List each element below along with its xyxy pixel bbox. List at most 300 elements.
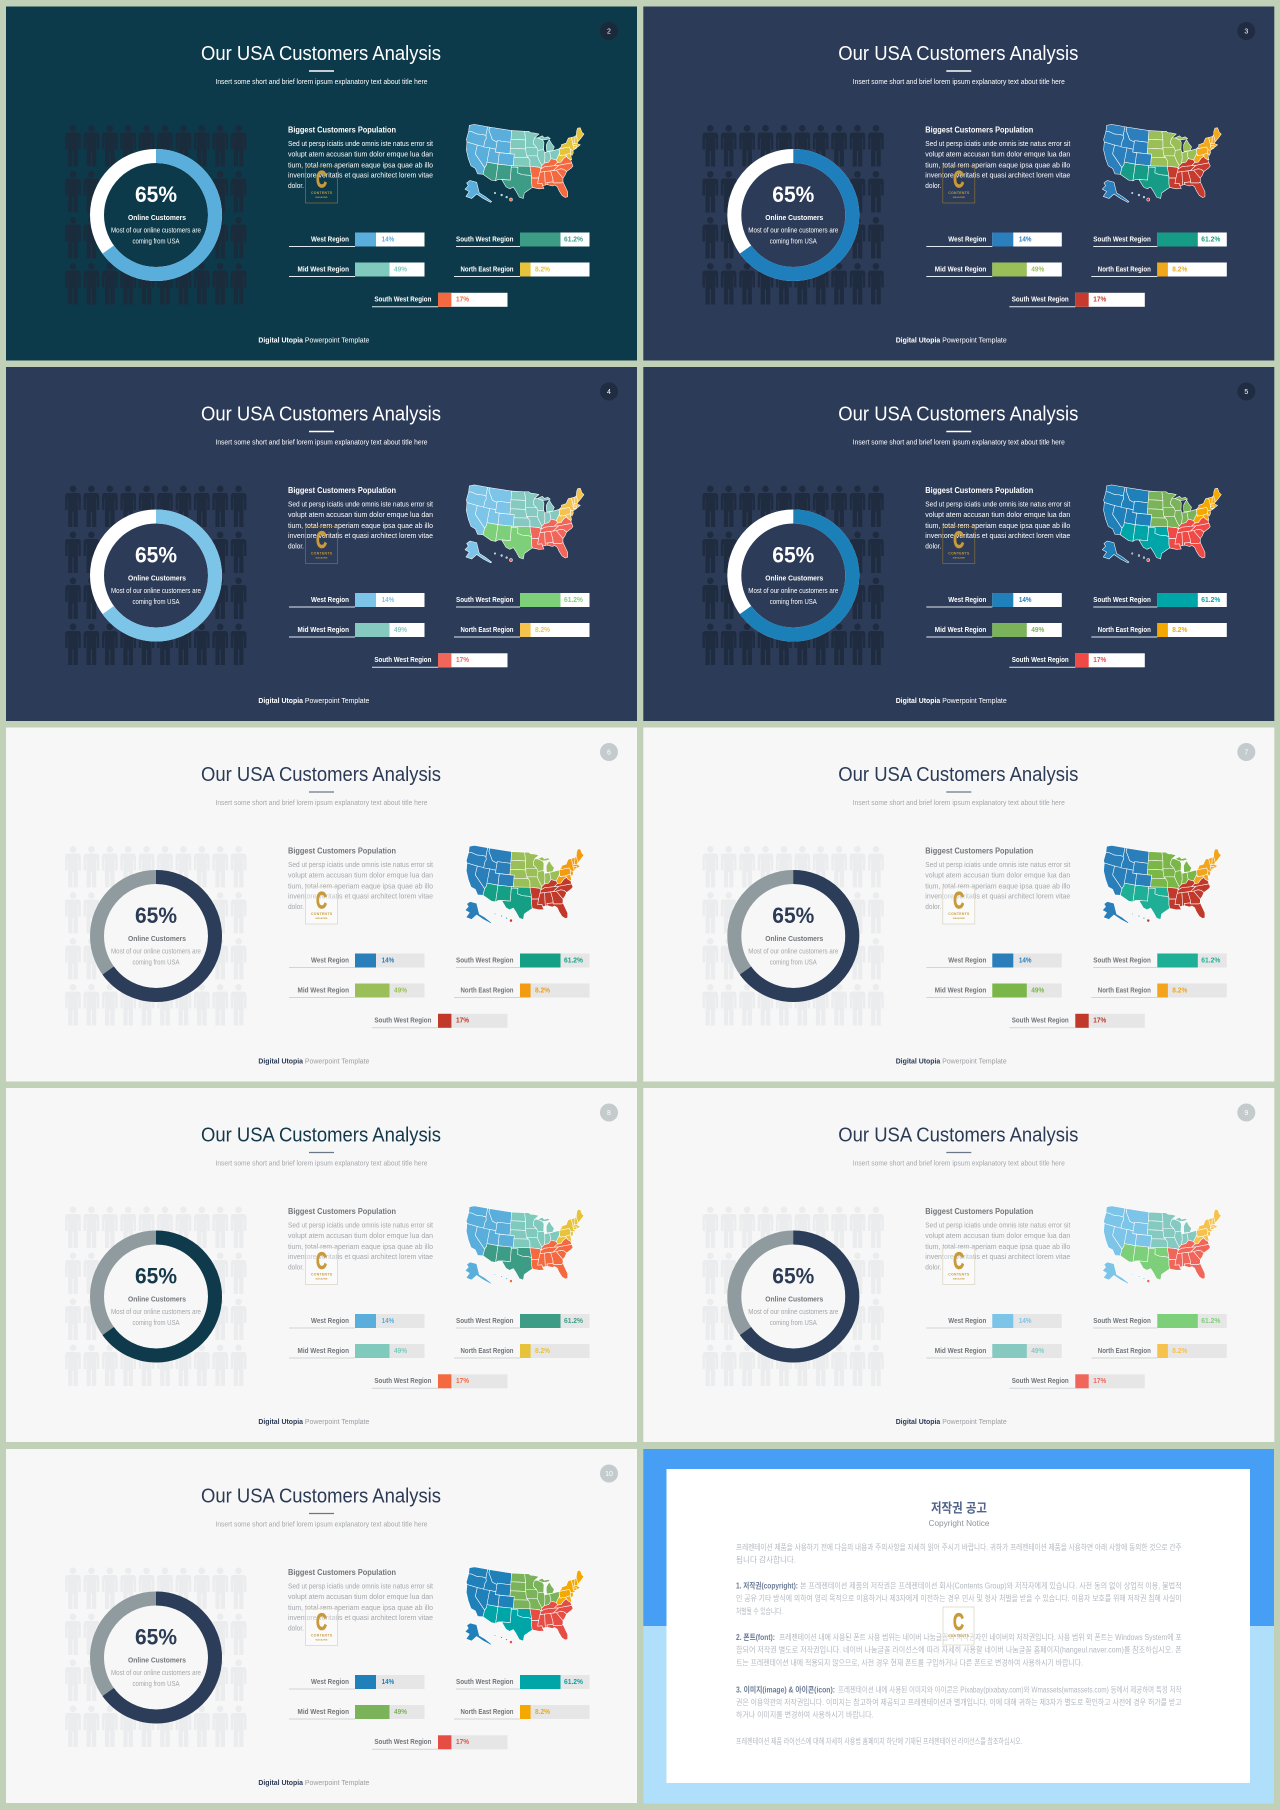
body text: inventore veritatis et quasi architect lorem vitae	[288, 1254, 433, 1261]
slide background	[643, 6, 1274, 360]
bar: West Region: 14%	[382, 1316, 394, 1325]
heading: biggest customers: Biggest Customers Population	[288, 1207, 396, 1216]
clause 3: image and icon: 프레젠테이션 내에 사용된 이미지와 아이콘은 Pixabay(pixabay.com)와 Wmassets(wmassets.com) 등에서 제공하며 특정 저작	[838, 1684, 1182, 1694]
donut chart: 65%: 65%	[135, 1264, 177, 1288]
heading: biggest customers: Biggest Customers Population	[925, 847, 1033, 856]
donut chart: 65%: Most of our online customers are	[111, 588, 201, 595]
panel: slide 6 light	[6, 728, 637, 1082]
slide background	[6, 1088, 637, 1442]
watermark: CONTENTS	[948, 1272, 970, 1276]
bar: South West Region lower: South West Region	[374, 655, 432, 664]
body text: Sed ut persp iciatis unde omnis iste natus error sit	[288, 1222, 433, 1230]
donut chart: 65%: Online Customers	[128, 574, 186, 582]
bar: North East Region: 8.2%	[1172, 625, 1188, 634]
watermark: C	[316, 527, 327, 554]
clause 3: image and icon: 권은 이용약관의 저작권입니다. 이미지는 참고하여 제공되고 프레젠테이션과 별개입니다. 이에 대해 귀하는 제3자가 별도로 확인하고 사전에 경우 허가를 받고	[736, 1697, 1182, 1707]
page number badge: 4	[607, 389, 611, 396]
footer: Digital Utopia Powerpoint Template	[896, 1419, 1007, 1426]
body text	[288, 1222, 433, 1272]
subtitle: Insert some short and brief lorem ipsum explanatory text about title here	[853, 79, 1065, 86]
bar: South West Region lower	[1009, 293, 1145, 307]
page number badge: 6	[607, 750, 611, 756]
body text	[925, 1222, 1070, 1272]
bar: South West Region lower: South West Region	[374, 1376, 432, 1385]
subtitle: Insert some short and brief lorem ipsum explanatory text about title here	[853, 800, 1065, 807]
page number badge	[600, 743, 618, 761]
bar: North East Region: North East Region	[460, 625, 514, 634]
body text: tium, total rem aperiam eaque ipsa quae ab illo	[288, 1605, 433, 1612]
intro paragraph: 됩니다 감사합니다.	[736, 1555, 796, 1565]
watermark: MAGAZINE	[953, 917, 965, 920]
body text: volupt atem accusan tium dolor emque lua dan	[925, 1233, 1070, 1240]
people pictogram	[702, 846, 884, 1026]
bar: West Region	[926, 1314, 1062, 1328]
heading: biggest customers: Biggest Customers Population	[925, 126, 1033, 135]
bar: South West Region lower: 17%	[456, 655, 469, 664]
bar: South West Region lower	[372, 653, 508, 667]
body text	[925, 502, 1070, 550]
bar: North East Region	[1091, 1344, 1227, 1358]
bar: West Region: 14%	[1019, 234, 1032, 244]
watermark: CONTENTS	[948, 552, 970, 556]
bar: South West Region lower	[1009, 1014, 1145, 1028]
watermark: CONTENTS	[311, 552, 333, 556]
body text: volupt atem accusan tium dolor emque lua dan	[288, 512, 433, 519]
people pictogram	[65, 1206, 246, 1386]
watermark: C	[953, 166, 964, 194]
light blue background lower	[643, 1626, 1274, 1804]
donut chart: 65%	[97, 156, 215, 274]
bar: Mid West Region: 49%	[1031, 625, 1045, 634]
title: Our USA Customers Analysis	[201, 43, 441, 65]
watermark: MAGAZINE	[953, 1278, 965, 1280]
bar: North East Region: North East Region	[1098, 1346, 1151, 1355]
people pictogram	[65, 486, 246, 665]
watermark: CONTENTS	[948, 1634, 970, 1638]
bar: South West Region lower: South West Region	[1012, 1016, 1069, 1025]
page number badge: 2	[607, 28, 611, 36]
bar: South West Region: 61.2%	[564, 956, 583, 964]
people pictogram	[702, 125, 884, 304]
bar: South West Region lower: 17%	[1093, 1376, 1107, 1385]
watermark	[306, 166, 338, 203]
clause 1: copyright	[736, 1580, 1182, 1616]
heading: biggest customers: Biggest Customers Population	[925, 486, 1033, 495]
bar: Mid West Region	[926, 984, 1062, 998]
bar: West Region: West Region	[311, 1316, 349, 1325]
body text: inventore veritatis et quasi architect lorem vitae	[288, 1615, 433, 1622]
page number badge	[600, 382, 618, 400]
USA region map	[465, 1206, 584, 1284]
bar: North East Region: North East Region	[460, 986, 514, 995]
page number badge	[600, 1104, 618, 1122]
watermark	[306, 1608, 338, 1646]
footer: Digital Utopia Powerpoint Template	[896, 698, 1007, 705]
USA region map	[1102, 1206, 1221, 1284]
watermark	[943, 887, 975, 924]
USA region map	[1102, 485, 1221, 563]
bar: Mid West Region	[289, 262, 424, 276]
bar: South West Region: 61.2%	[1201, 956, 1221, 964]
body text: tium, total rem aperiam eaque ipsa quae ab illo	[925, 162, 1070, 169]
watermark	[306, 526, 338, 564]
bar: South West Region	[456, 954, 590, 968]
bar: South West Region	[1093, 1314, 1227, 1328]
bar: Mid West Region	[926, 262, 1062, 276]
body text	[288, 141, 433, 190]
clause 2: font: 2. 폰트(font):	[736, 1633, 775, 1642]
bar: West Region: 14%	[382, 956, 394, 964]
donut chart: 65%: Most of our online customers are	[111, 949, 201, 956]
watermark: CONTENTS	[311, 1272, 333, 1276]
bar: Mid West Region: 49%	[394, 1707, 407, 1716]
body text: Sed ut persp iciatis unde omnis iste natus error sit	[288, 141, 433, 148]
donut chart: 65%: Most of our online customers are	[111, 1670, 201, 1677]
bar: South West Region lower	[1009, 1374, 1145, 1388]
bar: Mid West Region: 49%	[1031, 986, 1045, 995]
bar: South West Region: South West Region	[456, 1316, 514, 1325]
bar: Mid West Region: 49%	[394, 986, 407, 995]
donut chart: 65%: Online Customers	[765, 574, 823, 582]
clause 2: font	[736, 1632, 1182, 1668]
donut chart: 65%: 65%	[135, 1624, 177, 1650]
bar: South West Region: 61.2%	[564, 234, 583, 244]
body text: dolor.	[925, 544, 941, 550]
bar: West Region	[926, 593, 1062, 607]
bar: West Region	[289, 954, 424, 968]
body text: tium, total rem aperiam eaque ipsa quae ab illo	[288, 523, 433, 530]
watermark	[943, 166, 975, 203]
donut chart: 65%: coming from USA	[770, 599, 817, 606]
body text: tium, total rem aperiam eaque ipsa quae ab illo	[925, 883, 1070, 890]
watermark: CONTENTS	[948, 912, 970, 916]
bar: North East Region: 8.2%	[1172, 1346, 1188, 1355]
bar: Mid West Region: Mid West Region	[298, 265, 349, 274]
bar: Mid West Region: Mid West Region	[298, 1707, 349, 1716]
bar: South West Region: South West Region	[1093, 595, 1151, 604]
bar: South West Region lower: 17%	[456, 1016, 469, 1025]
bar: South West Region: South West Region	[1093, 956, 1151, 964]
bar: South West Region: South West Region	[456, 234, 514, 244]
bar: Mid West Region	[289, 984, 424, 998]
bar: South West Region: 61.2%	[564, 595, 583, 604]
bar: South West Region: South West Region	[456, 956, 514, 964]
bar: West Region: West Region	[311, 1677, 349, 1686]
white card	[666, 1469, 1250, 1783]
USA region map	[465, 485, 584, 563]
body text: tium, total rem aperiam eaque ipsa quae ab illo	[925, 523, 1070, 530]
donut chart: 65%: Online Customers	[128, 934, 186, 943]
subtitle: Insert some short and brief lorem ipsum explanatory text about title here	[216, 1160, 428, 1168]
subtitle: Insert some short and brief lorem ipsum explanatory text about title here	[853, 440, 1065, 446]
watermark: CONTENTS	[311, 912, 333, 916]
bar: South West Region lower	[372, 1014, 508, 1028]
bar: South West Region lower	[1009, 653, 1145, 667]
body text: tium, total rem aperiam eaque ipsa quae ab illo	[925, 1244, 1070, 1251]
bar: West Region	[926, 232, 1062, 246]
watermark: CONTENTS	[311, 191, 333, 195]
panel: slide 2 teal	[6, 6, 637, 360]
bar: Mid West Region	[289, 1705, 424, 1719]
bar: South West Region lower: 17%	[1093, 655, 1107, 664]
title: Our USA Customers Analysis	[201, 1124, 441, 1146]
panel: slide 3 navy	[643, 6, 1274, 360]
slide background	[643, 1088, 1274, 1442]
bar: North East Region: North East Region	[460, 1707, 514, 1716]
bar: South West Region lower	[372, 1374, 508, 1388]
bar: Mid West Region: Mid West Region	[935, 1346, 987, 1355]
slide background	[643, 728, 1274, 1082]
bar: South West Region lower: South West Region	[1012, 1376, 1069, 1385]
bar: South West Region lower	[372, 1735, 508, 1749]
watermark: C	[953, 527, 964, 554]
bar: South West Region	[456, 1675, 590, 1689]
watermark: MAGAZINE	[316, 1638, 328, 1642]
bar: South West Region: 61.2%	[1201, 234, 1221, 244]
donut chart: 65%: 65%	[772, 542, 814, 568]
watermark	[943, 1607, 974, 1645]
donut chart: 65%: Most of our online customers are	[748, 1309, 838, 1316]
blue background upper	[643, 1449, 1274, 1626]
clause 1: copyright: 본 프레젠테이션 제품의 저작권은 프레젠테이션 회사(Contents Group)와 저작자에게 있습니다. 사전 동의 없이 상업적 이용, 불법적	[800, 1580, 1182, 1590]
people pictogram	[65, 125, 246, 304]
notice subtitle: Copyright Notice	[928, 1518, 990, 1528]
body text: dolor.	[288, 1626, 304, 1632]
bar: West Region: 14%	[382, 1677, 394, 1686]
donut chart: 65%: Most of our online customers are	[111, 228, 201, 235]
bar: South West Region lower: South West Region	[1012, 655, 1069, 664]
page number badge	[1237, 22, 1255, 40]
body text: inventore veritatis et quasi architect lorem vitae	[288, 533, 433, 540]
bar: South West Region: South West Region	[1093, 234, 1151, 244]
bar: West Region: 14%	[1019, 595, 1032, 604]
body text: Sed ut persp iciatis unde omnis iste natus error sit	[288, 862, 433, 869]
bar: North East Region	[1091, 984, 1227, 998]
slide background	[6, 367, 637, 721]
bar: North East Region: 8.2%	[535, 265, 550, 274]
donut chart: 65%: 65%	[135, 903, 177, 928]
watermark: MAGAZINE	[316, 196, 328, 199]
bar: South West Region: 61.2%	[1201, 595, 1221, 604]
bar: South West Region	[1093, 232, 1227, 246]
donut chart: 65%: coming from USA	[770, 960, 817, 966]
bar: West Region: West Region	[948, 1316, 987, 1325]
bar: North East Region: 8.2%	[535, 986, 550, 995]
bar: Mid West Region	[926, 1344, 1062, 1358]
body text	[288, 502, 433, 550]
donut chart: 65%: Online Customers	[765, 213, 823, 222]
donut chart: 65%: Online Customers	[765, 934, 823, 943]
watermark: C	[316, 166, 327, 194]
bar: Mid West Region: 49%	[394, 1346, 407, 1355]
page number badge	[600, 1464, 618, 1482]
donut chart: 65%: Online Customers	[128, 1656, 186, 1664]
bar: North East Region	[1091, 262, 1227, 276]
donut chart: 65%: coming from USA	[132, 960, 180, 966]
donut chart: 65%	[97, 877, 215, 995]
bar: North East Region	[454, 1344, 590, 1358]
donut chart: 65%: Most of our online customers are	[748, 949, 838, 956]
closing note: 프레젠테이션 제품 라이선스에 대해 자세히 사용법 홈페이지 하단에 기재된 프레젠테이션 라이선스를 참조하십시오.	[736, 1736, 1022, 1746]
panel: slide 4 navy	[6, 367, 637, 721]
donut chart: 65%: Most of our online customers are	[748, 588, 838, 595]
clause 3: image and icon	[736, 1684, 1182, 1720]
donut chart: 65%: Online Customers	[765, 1294, 823, 1304]
bar: West Region	[289, 593, 424, 607]
body text: volupt atem accusan tium dolor emque lua dan	[288, 873, 433, 880]
donut chart: 65%: coming from USA	[132, 599, 180, 606]
donut chart: 65%	[734, 1238, 852, 1356]
bar: South West Region: 61.2%	[1201, 1316, 1221, 1325]
heading: biggest customers: Biggest Customers Population	[288, 1568, 396, 1577]
page number badge: 5	[1244, 389, 1248, 396]
page number badge: 7	[1244, 750, 1248, 756]
bar: South West Region lower: 17%	[1093, 295, 1107, 304]
bar: Mid West Region: 49%	[394, 265, 407, 274]
title: Our USA Customers Analysis	[838, 764, 1078, 786]
footer: Digital Utopia Powerpoint Template	[258, 1419, 370, 1426]
clause 3: image and icon: 3. 이미지(image) & 아이콘(icon):	[736, 1684, 835, 1694]
bar: West Region: West Region	[948, 595, 987, 604]
bar: North East Region: 8.2%	[1172, 986, 1188, 995]
page number badge	[1237, 382, 1255, 400]
bar: North East Region: North East Region	[1098, 986, 1151, 995]
bar: West Region	[289, 1314, 424, 1328]
body text: Sed ut persp iciatis unde omnis iste natus error sit	[925, 141, 1070, 148]
bar: North East Region	[1091, 623, 1227, 637]
bar: West Region: 14%	[1019, 1316, 1032, 1325]
slide background	[6, 1449, 637, 1803]
heading: biggest customers: Biggest Customers Population	[925, 1207, 1033, 1216]
body text: dolor.	[288, 183, 304, 190]
donut chart: 65%	[734, 156, 852, 274]
bar: West Region	[289, 232, 424, 246]
body text: dolor.	[288, 1264, 304, 1272]
donut chart: 65%: 65%	[135, 182, 177, 207]
bar: North East Region: North East Region	[460, 265, 514, 274]
watermark: CONTENTS	[311, 1634, 333, 1638]
bar: South West Region lower: 17%	[456, 1737, 469, 1746]
bar: North East Region: 8.2%	[535, 1707, 550, 1716]
bar: South West Region lower: South West Region	[374, 295, 432, 304]
bar: West Region	[289, 1675, 424, 1689]
bar: Mid West Region	[289, 1344, 424, 1358]
panel: copyright notice	[643, 1449, 1274, 1804]
donut chart: 65%: 65%	[135, 542, 177, 568]
people pictogram	[702, 1206, 884, 1386]
bar: West Region: West Region	[311, 595, 349, 604]
body text: dolor.	[925, 183, 941, 190]
clause 2: font: 함되어 저작권 별도로 저작권입니다. 네이버 나눔글꼴 라이선스에 따라 자세히 사용할 네이버 나눔글꼴 홈페이지(hangeul.naver.com)를 참조하십시오. 폰	[736, 1645, 1182, 1655]
clause 1: copyright: 인 공유 기타 방식에 의하여 영리 목적으로 이용하거나 제3자에게 이전하는 경우 민사 및 형사 처벌을 받을 수 있습니다. 이용자 보호를 위해 저작권 침해 사실이	[736, 1593, 1182, 1603]
watermark	[306, 1248, 338, 1284]
bar: West Region: 14%	[1019, 956, 1032, 964]
bar: South West Region: 61.2%	[564, 1677, 583, 1686]
bar: West Region: West Region	[311, 956, 349, 964]
bar: North East Region: North East Region	[460, 1346, 514, 1355]
bar: North East Region: 8.2%	[535, 625, 550, 634]
body text: Sed ut persp iciatis unde omnis iste natus error sit	[925, 502, 1070, 508]
watermark: MAGAZINE	[316, 917, 328, 920]
footer: Digital Utopia Powerpoint Template	[896, 1059, 1007, 1066]
panel: slide 8 light	[6, 1088, 637, 1442]
bar: North East Region	[454, 623, 590, 637]
bar: South West Region: South West Region	[456, 595, 514, 604]
page number badge: 9	[1244, 1110, 1248, 1117]
bar: South West Region: South West Region	[1093, 1316, 1151, 1325]
body text: tium, total rem aperiam eaque ipsa quae ab illo	[288, 1244, 433, 1251]
watermark: MAGAZINE	[953, 196, 965, 199]
bar: North East Region	[454, 1705, 590, 1719]
bar: Mid West Region: Mid West Region	[298, 625, 349, 634]
body text: inventore veritatis et quasi architect lorem vitae	[288, 173, 433, 180]
panel: slide 5 navy	[643, 367, 1274, 721]
slide background	[643, 367, 1274, 721]
body text: dolor.	[288, 904, 304, 911]
bar: Mid West Region: 49%	[1031, 265, 1045, 274]
clause 2: font: 프레젠테이션 내에 사용된 폰트 사용 범위는 네이버 나눔글꼴의 저작권자인 네이버의 저작권입니다. 사용 범위 외 폰트는 Windows System에 포	[779, 1632, 1182, 1642]
page number badge	[1237, 743, 1255, 761]
USA region map	[1102, 124, 1221, 202]
watermark: C	[316, 1609, 327, 1636]
body text: volupt atem accusan tium dolor emque lua dan	[288, 1233, 433, 1240]
donut chart: 65%: Most of our online customers are	[111, 1309, 201, 1316]
title: Our USA Customers Analysis	[201, 1486, 441, 1508]
bar: West Region: West Region	[311, 234, 349, 244]
bar: Mid West Region: 49%	[1031, 1346, 1045, 1355]
donut chart: 65%	[97, 1598, 215, 1716]
body text: Sed ut persp iciatis unde omnis iste natus error sit	[925, 1222, 1070, 1230]
watermark: C	[953, 1248, 964, 1275]
page number badge: 8	[607, 1110, 611, 1117]
body text	[288, 1584, 433, 1632]
USA region map	[465, 124, 584, 202]
bar: South West Region	[1093, 593, 1227, 607]
bar: Mid West Region: 49%	[394, 625, 407, 634]
subtitle: Insert some short and brief lorem ipsum explanatory text about title here	[216, 1522, 428, 1528]
heading: biggest customers: Biggest Customers Population	[288, 847, 396, 856]
USA region map	[1102, 845, 1221, 923]
bar: North East Region: North East Region	[1098, 625, 1151, 634]
bar: South West Region lower: South West Region	[1012, 295, 1069, 304]
footer: Digital Utopia Powerpoint Template	[258, 1780, 370, 1787]
donut chart: 65%: Most of our online customers are	[748, 228, 838, 235]
title: Our USA Customers Analysis	[201, 404, 441, 426]
watermark: MAGAZINE	[316, 556, 328, 560]
page number badge	[1237, 1104, 1255, 1122]
body text: inventore veritatis et quasi architect lorem vitae	[288, 894, 433, 901]
intro paragraph	[736, 1542, 1182, 1565]
USA region map	[465, 1567, 584, 1645]
body text: volupt atem accusan tium dolor emque lua dan	[925, 152, 1070, 159]
body text: volupt atem accusan tium dolor emque lua dan	[288, 1594, 433, 1601]
subtitle: Insert some short and brief lorem ipsum explanatory text about title here	[853, 1160, 1065, 1168]
body text: dolor.	[925, 904, 941, 911]
slide background	[6, 728, 637, 1082]
bar: West Region: 14%	[382, 595, 394, 604]
watermark	[943, 526, 975, 564]
body text: volupt atem accusan tium dolor emque lua dan	[925, 873, 1070, 880]
donut chart: 65%: coming from USA	[770, 238, 817, 246]
body text: inventore veritatis et quasi architect lorem vitae	[925, 894, 1070, 901]
bar: Mid West Region: Mid West Region	[935, 265, 987, 274]
donut chart: 65%: Online Customers	[128, 213, 186, 222]
subtitle: Insert some short and brief lorem ipsum explanatory text about title here	[216, 440, 428, 446]
bar: North East Region: 8.2%	[1172, 265, 1188, 274]
clause 3: image and icon: 하거나 이미지를 변경하여 사용하시기 바랍니다.	[736, 1710, 874, 1720]
bar: North East Region: 8.2%	[535, 1346, 550, 1355]
body text: volupt atem accusan tium dolor emque lua dan	[288, 152, 433, 159]
